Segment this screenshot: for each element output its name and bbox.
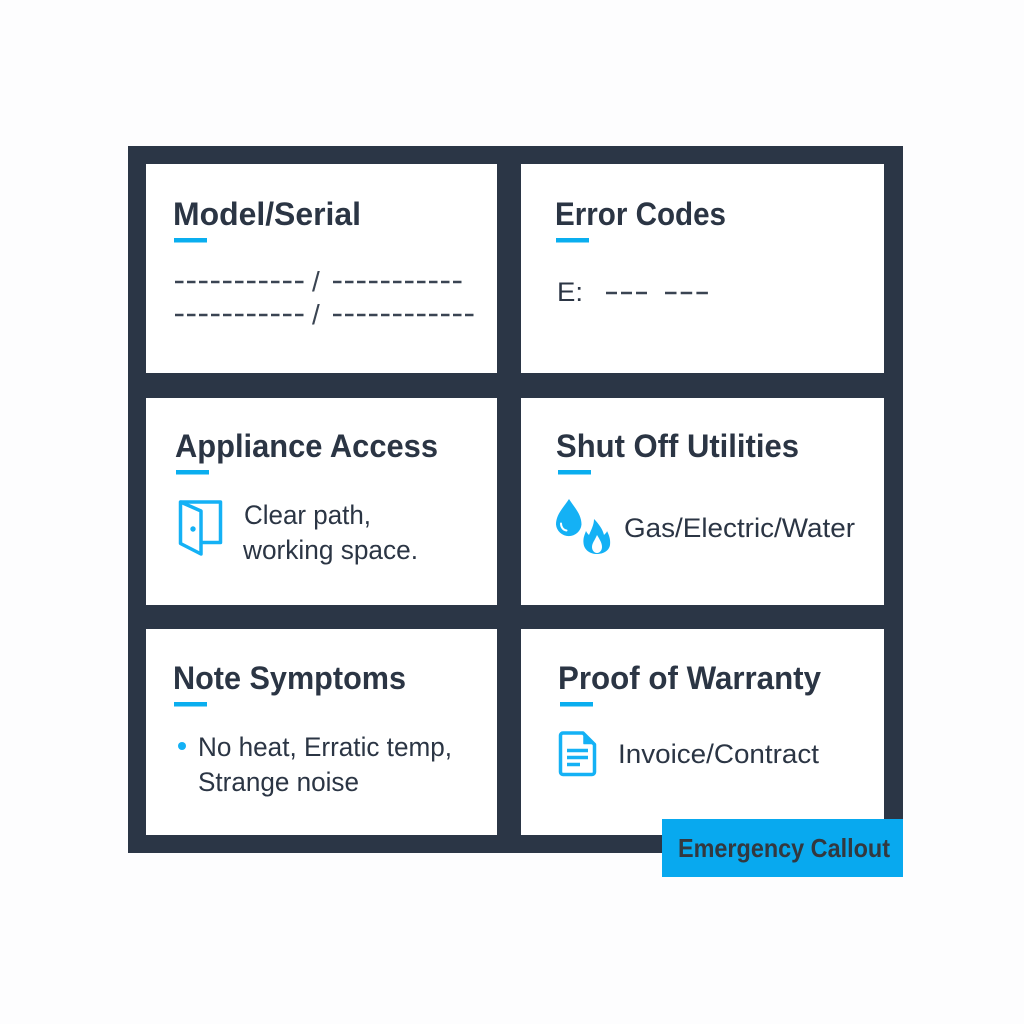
bullet (178, 742, 186, 750)
serial line two: / (312, 299, 320, 330)
heading: shut off utilities: Shut Off Utilities (556, 428, 799, 464)
utilities description: Gas/Electric/Water (624, 513, 855, 543)
accent underline (560, 702, 593, 706)
symptoms description: Strange noise (198, 767, 359, 797)
panel: note symptoms (146, 629, 497, 835)
icon: door (180, 502, 220, 554)
icon: flame (583, 519, 610, 554)
accent underline (174, 238, 207, 242)
accent underline (174, 702, 207, 706)
access description (242, 500, 418, 565)
heading: model/serial: Model/Serial (173, 196, 361, 232)
accent underline (558, 470, 591, 474)
access description: working space. (242, 535, 418, 565)
heading: note symptoms: Note Symptoms (173, 660, 406, 696)
heading: appliance access: Appliance Access (175, 428, 438, 464)
dark grid frame (128, 146, 903, 853)
icon: document (560, 733, 594, 775)
panel: appliance access (146, 398, 497, 605)
heading: error codes: Error Codes (555, 196, 726, 232)
symptoms description (198, 732, 452, 797)
error code blanks (606, 292, 708, 294)
serial line one: / (312, 266, 320, 297)
accent underline (176, 470, 209, 474)
error code label: E: (557, 277, 583, 307)
warranty description: Invoice/Contract (618, 739, 820, 769)
panel: error codes (521, 164, 884, 373)
symptoms description: No heat, Erratic temp, (198, 732, 452, 762)
panel: proof of warranty (521, 629, 884, 835)
heading: proof of warranty: Proof of Warranty (558, 660, 821, 696)
panel: shut off utilities (521, 398, 884, 605)
access description: Clear path, (244, 500, 371, 530)
callout: emergency callout: Emergency Callout (678, 833, 890, 863)
callout: emergency callout (662, 819, 903, 877)
icon: water drop (556, 499, 582, 536)
panel: model/serial (146, 164, 497, 373)
accent underline (556, 238, 589, 242)
